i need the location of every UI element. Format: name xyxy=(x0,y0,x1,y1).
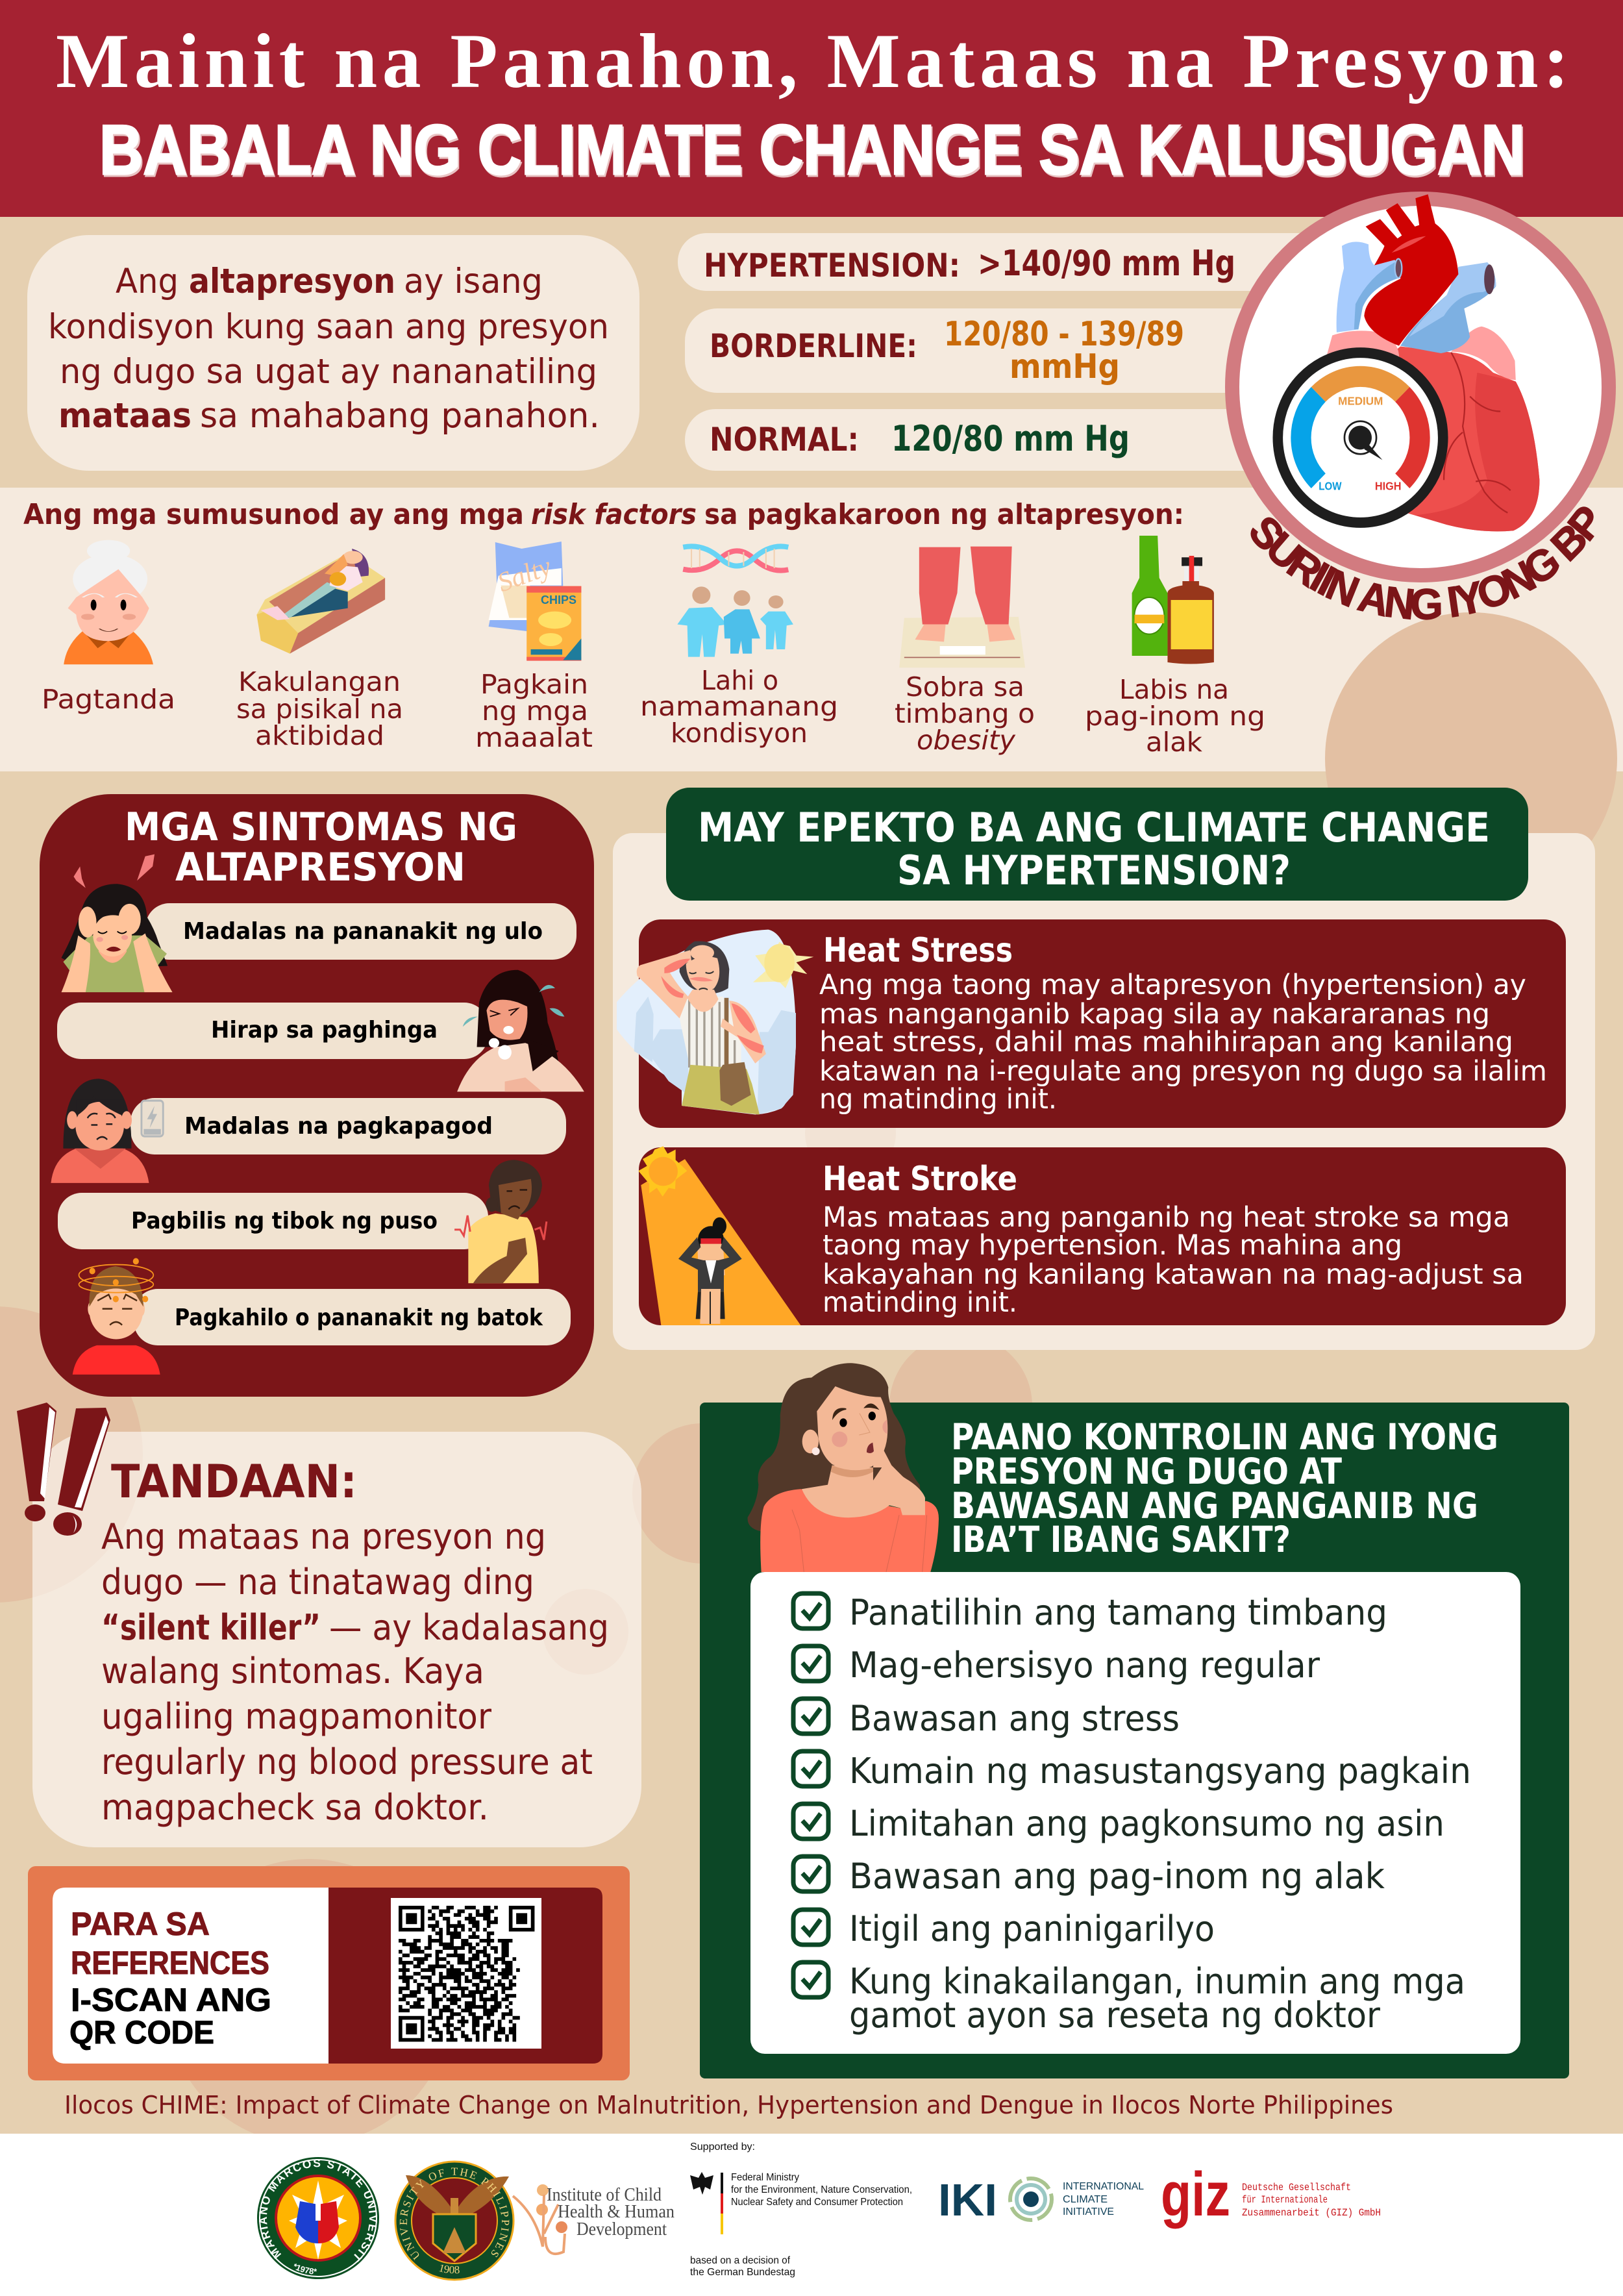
references text: I-SCAN ANG xyxy=(71,1982,271,2018)
references text: REFERENCES xyxy=(71,1945,269,1981)
decorative circle left xyxy=(0,1306,143,1603)
panel: tandaan reminder xyxy=(17,1403,641,1847)
checklist text: Itigil ang paninigarilyo xyxy=(849,1908,1215,1949)
icon: breathless person xyxy=(457,970,584,1092)
logo: German Federal Ministry: Nuclear Safety and Consumer Protection xyxy=(731,2197,903,2208)
normal row xyxy=(685,409,1334,471)
borderline row: BORDERLINE: xyxy=(710,327,917,365)
tandaan body text: regularly ng blood pressure at xyxy=(101,1741,593,1782)
symptom pills xyxy=(57,903,576,1345)
heart and gauge badge xyxy=(1225,192,1616,620)
icon: salty snacks xyxy=(489,542,581,661)
label: alcohol: alak xyxy=(1146,727,1202,758)
symptoms heading: ALTAPRESYON xyxy=(175,845,465,890)
decorative circle right xyxy=(1325,612,1617,905)
control heading: PAANO KONTROLIN ANG IYONG xyxy=(951,1416,1498,1458)
logo: Institute of Child Health and Human Development: Health & Human xyxy=(558,2202,675,2222)
panel: references QR xyxy=(28,1866,630,2080)
checklist text: Kumain ng masustangsyang pagkain xyxy=(849,1751,1471,1791)
logo: German Federal Ministry: Federal Ministry xyxy=(731,2172,799,2183)
control heading: IBA’T IBANG SAKIT? xyxy=(951,1519,1291,1560)
heat stress body text xyxy=(819,969,1547,1116)
logo: GIZ: Zusammenarbeit (GIZ) GmbH xyxy=(1242,2207,1381,2219)
logo: University of the Philippines: UNIVERSITY OF THE PHILIPPINES xyxy=(400,2167,509,2260)
tandaan body text: — ay kadalasang xyxy=(329,1607,609,1648)
tandaan body text: dugo — na tinatawag ding xyxy=(101,1562,534,1603)
symptom labels: Pagbilis ng tibok ng puso xyxy=(131,1208,438,1234)
label: salty food: ng mga xyxy=(482,695,588,727)
borderline row xyxy=(685,308,1334,393)
gauge: MEDIUM xyxy=(1338,394,1383,408)
label: heredity: namamanang xyxy=(640,691,838,722)
label: salty food xyxy=(475,669,593,753)
logo: GIZ: Deutsche Gesellschaft xyxy=(1242,2182,1351,2193)
decorative circle centre xyxy=(889,1334,1032,1477)
gauge xyxy=(1278,353,1443,523)
definition panel xyxy=(27,235,639,471)
snack labels: Salty xyxy=(493,551,555,598)
symptom labels xyxy=(131,918,543,1331)
risk factors heading: risk factors xyxy=(531,498,697,531)
references text: QR CODE xyxy=(69,2014,214,2051)
faint circle xyxy=(805,1088,896,1179)
header banner xyxy=(0,0,1623,217)
card: heat stress: Heat Stress xyxy=(823,931,1013,970)
logo: GIZ: giz xyxy=(1161,2160,1230,2229)
label: obesity: timbang o xyxy=(895,698,1035,729)
icon: legs on scale xyxy=(899,547,1025,668)
control heading: PRESYON NG DUGO AT xyxy=(951,1451,1342,1492)
symptom labels: Pagkahilo o pananakit ng batok xyxy=(175,1304,543,1331)
heat stroke body text: taong may hypertension. Mas mahina ang xyxy=(823,1229,1402,1262)
logo: Institute of Child Health and Human Development xyxy=(513,2184,675,2254)
icon: tired person xyxy=(51,1079,163,1183)
definition text: Ang xyxy=(116,262,179,301)
hypertension row xyxy=(678,233,1327,291)
icon: heart xyxy=(1326,194,1539,531)
logo: IKI xyxy=(938,2175,1144,2225)
borderline row: 120/80 - 139/89 xyxy=(944,315,1184,354)
icon: woman on couch xyxy=(256,549,385,654)
normal row: NORMAL: xyxy=(710,421,859,458)
risk factor labels xyxy=(42,665,1265,758)
checklist text: Mag-ehersisyo nang regular xyxy=(849,1645,1320,1686)
definition text: ay isang xyxy=(404,262,543,301)
check icons xyxy=(793,1593,828,1997)
illustration: person in sun beam xyxy=(638,1146,800,1325)
logo: MMSU xyxy=(257,2157,379,2279)
label: salty food: maaalat xyxy=(475,722,593,753)
faint circles through panel xyxy=(53,1436,641,1490)
illustration: woman under sun xyxy=(617,930,813,1115)
definition text: altapresyon xyxy=(189,262,395,301)
panel: symptoms xyxy=(40,794,594,1397)
heat stress body text: mas nanganganib kapag sila ay nakararanas ng xyxy=(819,998,1490,1030)
decorative circle references xyxy=(166,1859,452,2145)
gauge: HIGH xyxy=(1375,479,1401,492)
label: physical inactivity: sa pisikal na xyxy=(236,693,403,725)
logo: German Federal Ministry: for the Environment, Nature Conservation, xyxy=(731,2184,912,2195)
logo: Institute of Child Health and Human Development: Institute of Child xyxy=(547,2185,662,2205)
heat stroke body text: kakayahan ng kanilang katawan na mag-adjust sa xyxy=(823,1258,1524,1291)
decorative circle tandaan xyxy=(632,1423,773,1564)
label: aging: Pagtanda xyxy=(42,684,175,715)
logo: GIZ xyxy=(1161,2160,1381,2229)
panel: climate change and hypertension xyxy=(613,788,1595,1350)
title line 1: Mainit na Panahon, Mataas na Presyon: xyxy=(56,18,1569,104)
logo: German Federal Ministry: Supported by: xyxy=(690,2141,755,2152)
icon: exclamation marks xyxy=(17,1403,110,1536)
logo: IKI: INTERNATIONAL xyxy=(1063,2181,1144,2192)
logo: Institute of Child Health and Human Development: Development xyxy=(576,2219,667,2240)
checklist card xyxy=(750,1572,1520,2054)
heat stroke body text xyxy=(823,1201,1524,1319)
label: alcohol: Labis na xyxy=(1119,674,1229,705)
checklist text: Kung kinakailangan, inumin ang mga xyxy=(849,1961,1465,2002)
symptom labels: Hirap sa paghinga xyxy=(211,1017,438,1043)
panel heading banner: SA HYPERTENSION? xyxy=(897,847,1291,894)
logo: German Federal Ministry xyxy=(690,2141,912,2278)
label: heredity: kondisyon xyxy=(671,718,808,749)
card: heat stroke xyxy=(638,1146,1566,1325)
checklist text xyxy=(849,1592,1471,2036)
tandaan body text: Ang mataas na presyon ng xyxy=(101,1516,546,1557)
tandaan body text: magpacheck sa doktor. xyxy=(101,1787,489,1828)
definition text: mataas xyxy=(58,396,192,436)
heat stress body text: Ang mga taong may altapresyon (hypertension) ay xyxy=(819,969,1526,1001)
hypertension row: HYPERTENSION: xyxy=(704,247,960,284)
symptoms heading: MGA SINTOMAS NG xyxy=(125,805,517,850)
risk factor icons: CHIPS xyxy=(541,593,576,606)
icon: alcohol bottles xyxy=(1132,536,1214,664)
risk factor band background xyxy=(0,488,1623,771)
blood pressure categories xyxy=(678,233,1334,471)
card: heat stress xyxy=(617,919,1566,1128)
label: physical inactivity: aktibidad xyxy=(255,720,384,751)
illustration: thinking woman xyxy=(748,1363,939,1572)
label: obesity: obesity xyxy=(917,725,1016,756)
symptom labels: Madalas na pagkapagod xyxy=(184,1113,493,1140)
risk factor icons xyxy=(64,536,1214,668)
heat stress body text: katawan na i-regulate ang presyon ng dugo sa ilalim xyxy=(819,1055,1547,1088)
normal row: 120/80 mm Hg xyxy=(891,418,1130,459)
label: obesity: Sobra sa xyxy=(906,671,1024,703)
control heading xyxy=(951,1416,1498,1560)
panel heading banner: MAY EPEKTO BA ANG CLIMATE CHANGE xyxy=(698,804,1490,851)
curved label: SURIIN ANG IYONG BP xyxy=(1250,506,1594,620)
label: heredity xyxy=(640,665,838,749)
tandaan body text xyxy=(101,1516,609,1828)
logo: IKI: IKI xyxy=(938,2175,997,2225)
panel heading banner xyxy=(666,788,1528,901)
risk factors heading: Ang mga sumusunod ay ang mga xyxy=(23,498,524,531)
tandaan body text: walang sintomas. Kaya xyxy=(101,1651,484,1691)
logo: University of the Philippines: 1908 xyxy=(439,2265,460,2274)
label: heredity: Lahi o xyxy=(701,665,778,696)
heat stress body text: ng matinding init. xyxy=(819,1083,1057,1116)
references text xyxy=(69,1906,271,2051)
icon: headache person xyxy=(62,855,173,992)
checklist text: Limitahan ang pagkonsumo ng asin xyxy=(849,1803,1444,1844)
card: heat stroke: Heat Stroke xyxy=(823,1160,1017,1199)
risk factors heading: sa pagkakaroon ng altapresyon: xyxy=(704,498,1184,531)
risk factors heading xyxy=(23,498,1184,531)
hypertension row: >140/90 mm Hg xyxy=(978,243,1235,284)
heat stroke body text: Mas mataas ang panganib ng heat stroke sa mga xyxy=(823,1201,1510,1234)
logo: German Federal Ministry: the German Bundestag xyxy=(690,2267,795,2278)
icon: grandmother xyxy=(64,540,153,664)
symptom labels: Madalas na pananakit ng ulo xyxy=(183,918,543,945)
control heading: BAWASAN ANG PANGANIB NG xyxy=(951,1485,1478,1527)
definition text xyxy=(48,262,609,436)
borderline row: mmHg xyxy=(1010,347,1120,386)
gauge: LOW xyxy=(1319,479,1342,492)
references text: PARA SA xyxy=(71,1906,210,1942)
definition text: kondisyon kung saan ang presyon xyxy=(48,307,609,347)
label: salty food: Pagkain xyxy=(480,669,588,700)
QR code xyxy=(391,1898,541,2049)
label: alcohol: pag-inom ng xyxy=(1085,701,1265,732)
logo: MMSU: *1978* xyxy=(293,2264,317,2274)
definition text: ng dugo sa ugat ay nananatiling xyxy=(60,352,597,392)
project credit line: Ilocos CHIME: Impact of Climate Change on Malnutrition, Hypertension and Dengue in Ilocos Norte Philippines xyxy=(64,2091,1393,2119)
logo: IKI: CLIMATE xyxy=(1063,2194,1108,2205)
checklist text: Bawasan ang stress xyxy=(849,1698,1180,1739)
heat stress body text: heat stress, dahil mas mahihirapan ang kanilang xyxy=(819,1026,1513,1058)
tandaan body text: “silent killer” xyxy=(101,1607,321,1648)
label: alcohol xyxy=(1085,674,1265,758)
heat stroke body text: matinding init. xyxy=(823,1286,1017,1319)
label: physical inactivity: Kakulangan xyxy=(238,666,401,697)
icon: palpitations person xyxy=(454,1160,547,1283)
checklist text: Bawasan ang pag-inom ng alak xyxy=(849,1856,1385,1897)
panel: how to control blood pressure xyxy=(700,1363,1569,2078)
panel: tandaan reminder: TANDAAN: xyxy=(111,1455,357,1508)
logo: German Federal Ministry: based on a decision of xyxy=(690,2255,791,2266)
logo: MMSU: MARIANO MARCOS STATE UNIVERSITY xyxy=(259,2159,378,2262)
symptoms heading xyxy=(125,805,517,890)
definition text: sa mahabang panahon. xyxy=(200,396,600,436)
checklist text: gamot ayon sa reseta ng doktor xyxy=(849,1995,1381,2036)
tandaan body text: ugaliing magpamonitor xyxy=(101,1696,492,1737)
label: obesity xyxy=(895,671,1035,756)
icon: dizzy person xyxy=(73,1258,160,1375)
logo: IKI: INITIATIVE xyxy=(1063,2206,1114,2217)
label: physical inactivity xyxy=(236,666,403,751)
icon: DNA and family xyxy=(677,546,793,657)
logo: GIZ: für Internationale xyxy=(1242,2194,1328,2206)
checklist text: Panatilihin ang tamang timbang xyxy=(849,1592,1387,1633)
